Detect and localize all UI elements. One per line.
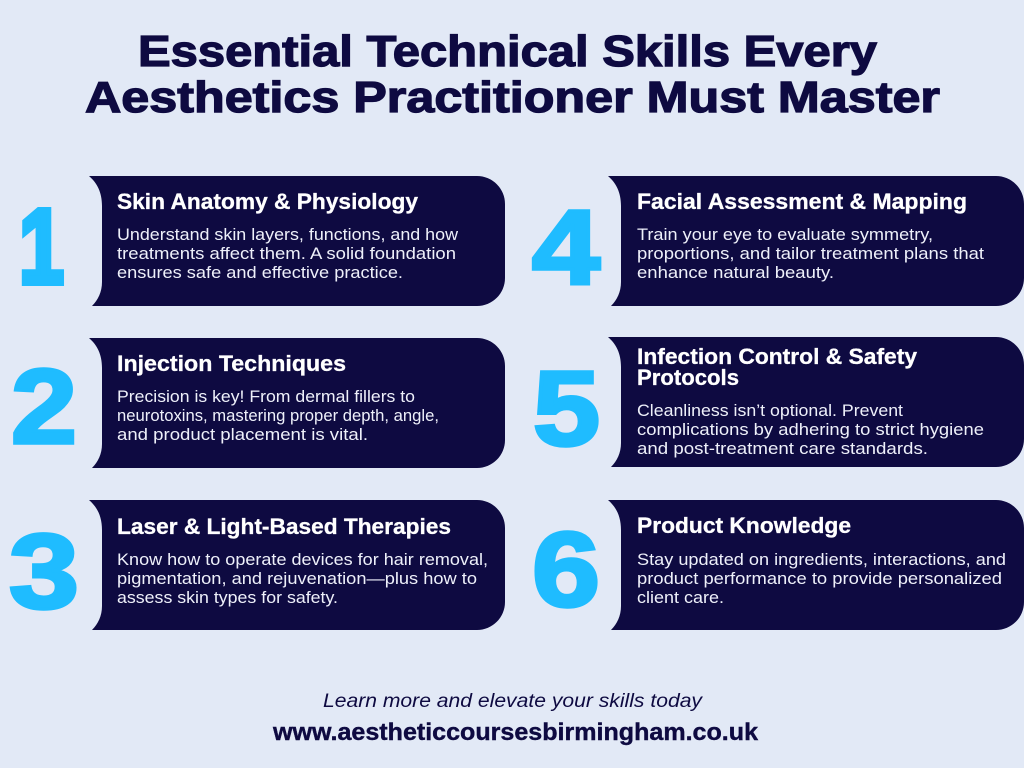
card 4 heading: Facial Assessment & Mapping <box>637 189 967 214</box>
title: Aesthetics Practitioner Must Master <box>85 73 940 122</box>
card 3 text: assess skin types for safety. <box>117 588 338 607</box>
card 1 text: treatments affect them. A solid foundation <box>117 244 456 263</box>
card 1 text: Understand skin layers, functions, and how <box>117 225 459 244</box>
card 3 background <box>89 500 505 630</box>
number 6: 6 <box>532 511 600 629</box>
panel: skill 1 skin anatomy <box>19 176 505 306</box>
card 5 text: and post-treatment care standards. <box>637 439 928 458</box>
footer website url: www.aestheticcoursesbirmingham.co.uk <box>272 719 759 746</box>
card 5 heading: Infection Control & Safety <box>637 344 918 369</box>
card 5 background <box>608 337 1024 467</box>
card 2 text: Precision is key! From dermal fillers to <box>117 387 415 406</box>
card 6 text: product performance to provide personalized <box>637 569 1002 588</box>
card 2 text: neurotoxins, mastering proper depth, angle, <box>117 406 439 425</box>
card 1 background <box>89 176 505 306</box>
panel: skill 2 injection techniques <box>11 338 505 468</box>
card 1 text: ensures safe and effective practice. <box>117 263 403 282</box>
card 6 text <box>637 550 1006 607</box>
card 6 heading: Product Knowledge <box>637 513 851 538</box>
card 2 text: and product placement is vital. <box>117 425 368 444</box>
card 3 heading: Laser & Light-Based Therapies <box>117 514 451 539</box>
card 1 heading: Skin Anatomy & Physiology <box>117 189 419 214</box>
card 6 text: client care. <box>637 588 724 607</box>
title <box>85 27 940 122</box>
number 3: 3 <box>9 513 79 631</box>
title: Essential Technical Skills Every <box>138 27 878 76</box>
card 3 text: pigmentation, and rejuvenation—plus how to <box>117 569 477 588</box>
card 4 text <box>637 225 984 282</box>
card 3 text <box>117 550 488 607</box>
card 4 background <box>608 176 1024 306</box>
number 4: 4 <box>532 189 600 307</box>
card 5 text: Cleanliness isn’t optional. Prevent <box>637 401 903 420</box>
number 5: 5 <box>533 350 600 468</box>
card 3 text: Know how to operate devices for hair removal, <box>117 550 488 569</box>
card 4 text: enhance natural beauty. <box>637 263 834 282</box>
card 5 text <box>637 401 984 458</box>
number 2: 2 <box>11 348 77 466</box>
panel: skill 4 facial assessment <box>532 176 1024 307</box>
panel: skill 5 infection control <box>533 337 1024 468</box>
card 4 text: proportions, and tailor treatment plans that <box>637 244 984 263</box>
card 1 text <box>117 225 459 282</box>
card 5 text: complications by adhering to strict hygiene <box>637 420 984 439</box>
card 2 heading: Injection Techniques <box>117 351 346 376</box>
card 5 heading <box>637 344 918 390</box>
card 6 background <box>608 500 1024 630</box>
panel: skill 6 product knowledge <box>532 500 1024 630</box>
card 6 text: Stay updated on ingredients, interactions, and <box>637 550 1006 569</box>
card 2 background <box>89 338 505 468</box>
footer call to action: Learn more and elevate your skills today <box>323 691 704 712</box>
card 2 text <box>117 387 439 444</box>
panel: skill 3 laser therapies <box>9 500 505 631</box>
number 1: 1 <box>19 188 64 306</box>
card 4 text: Train your eye to evaluate symmetry, <box>637 225 933 244</box>
card 5 heading: Protocols <box>637 365 739 390</box>
